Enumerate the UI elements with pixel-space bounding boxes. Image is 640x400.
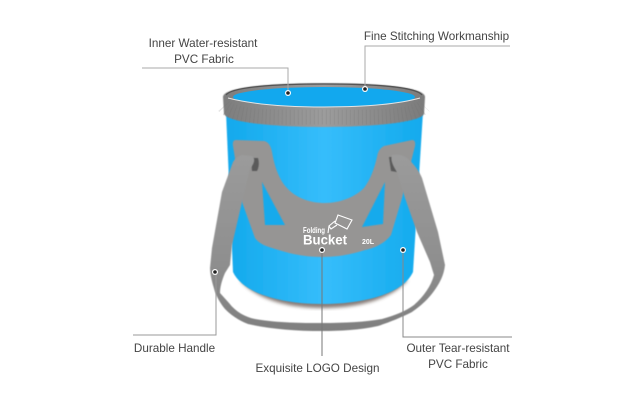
rim white lip — [228, 98, 420, 107]
callout: durable handle: Durable Handle — [134, 342, 215, 355]
logo text — [303, 215, 375, 248]
callout: exquisite logo design: Exquisite LOGO Design — [255, 362, 380, 375]
logo text: 20L — [362, 239, 375, 246]
bucket body — [226, 112, 423, 304]
grey handle panel with logo — [233, 140, 415, 257]
callout: inner water-resistant PVC fabric: Inner Water-resistant — [149, 37, 258, 50]
logo text: Bucket — [303, 232, 347, 248]
bucket illustration — [210, 83, 445, 331]
callout: inner water-resistant PVC fabric — [142, 37, 291, 96]
inner bucket wall — [233, 87, 415, 107]
rim band — [223, 83, 425, 127]
right window — [362, 182, 385, 227]
strap slot: left — [251, 158, 259, 171]
rim stitching texture — [224, 106, 424, 117]
left window — [262, 182, 285, 225]
callout: exquisite logo design — [255, 247, 380, 375]
callout: inner water-resistant PVC fabric: PVC Fabric — [174, 53, 234, 66]
logo text: Folding — [303, 225, 325, 235]
callout: fine stitching workmanship: Fine Stitching Workmanship — [364, 30, 510, 43]
callout: durable handle — [133, 269, 218, 355]
carrying strap loop — [210, 155, 445, 331]
callout: outer tear-resistant PVC fabric: Outer Tear-resistant — [406, 342, 510, 355]
callout: outer tear-resistant PVC fabric: PVC Fabric — [428, 358, 488, 371]
rim dark top edge — [226, 84, 422, 95]
icon: pouring bucket — [328, 215, 352, 233]
callout: fine stitching workmanship — [362, 30, 510, 92]
ground shadow — [240, 280, 408, 308]
strap slot: right — [389, 157, 397, 172]
callout: outer tear-resistant PVC fabric — [400, 247, 512, 371]
